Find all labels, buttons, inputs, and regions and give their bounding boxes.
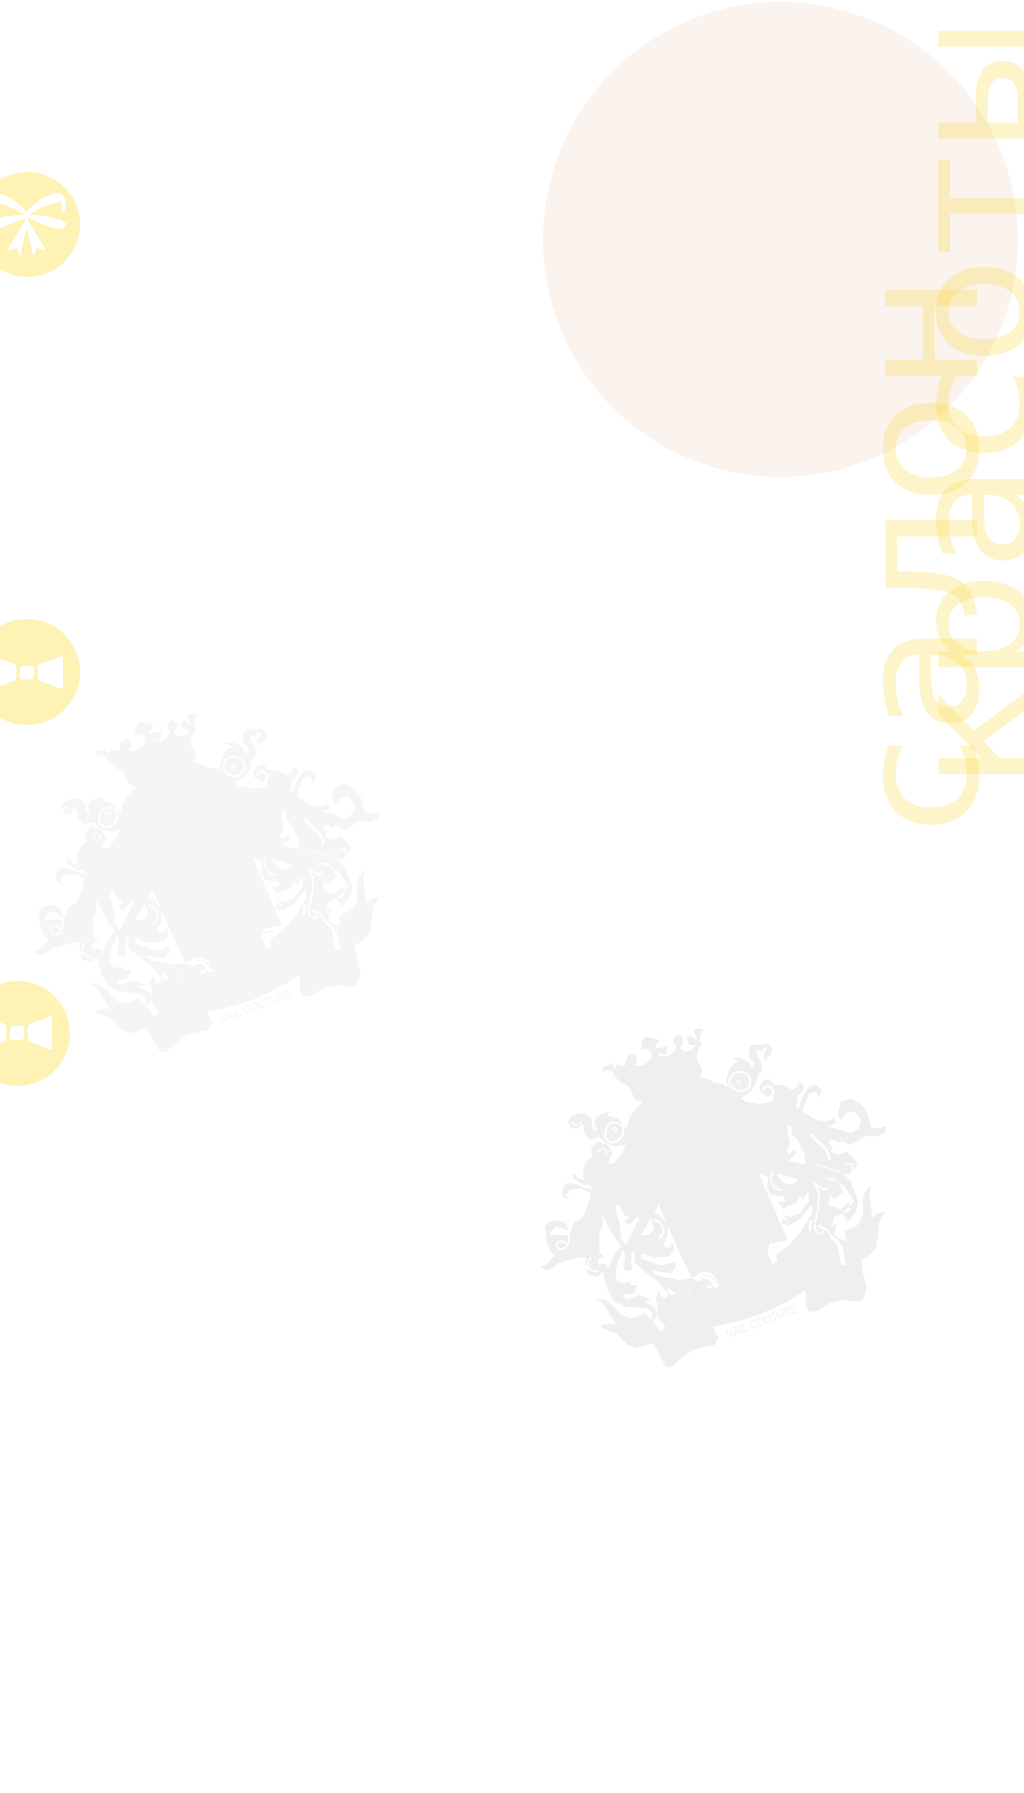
logo caption: NAIL COUTURE (724, 1301, 800, 1341)
icon: bow tie badge lower (0, 981, 70, 1086)
logo watermark: upper left (34, 713, 380, 1052)
logo watermark: lower right (540, 1028, 886, 1367)
icon: bow tie badge (0, 619, 80, 725)
background circle (543, 2, 1018, 477)
icon: bow ribbon badge (0, 172, 80, 277)
logo caption: NAIL COUTURE (218, 986, 294, 1026)
vertical heading: салон: салон (821, 273, 1017, 835)
